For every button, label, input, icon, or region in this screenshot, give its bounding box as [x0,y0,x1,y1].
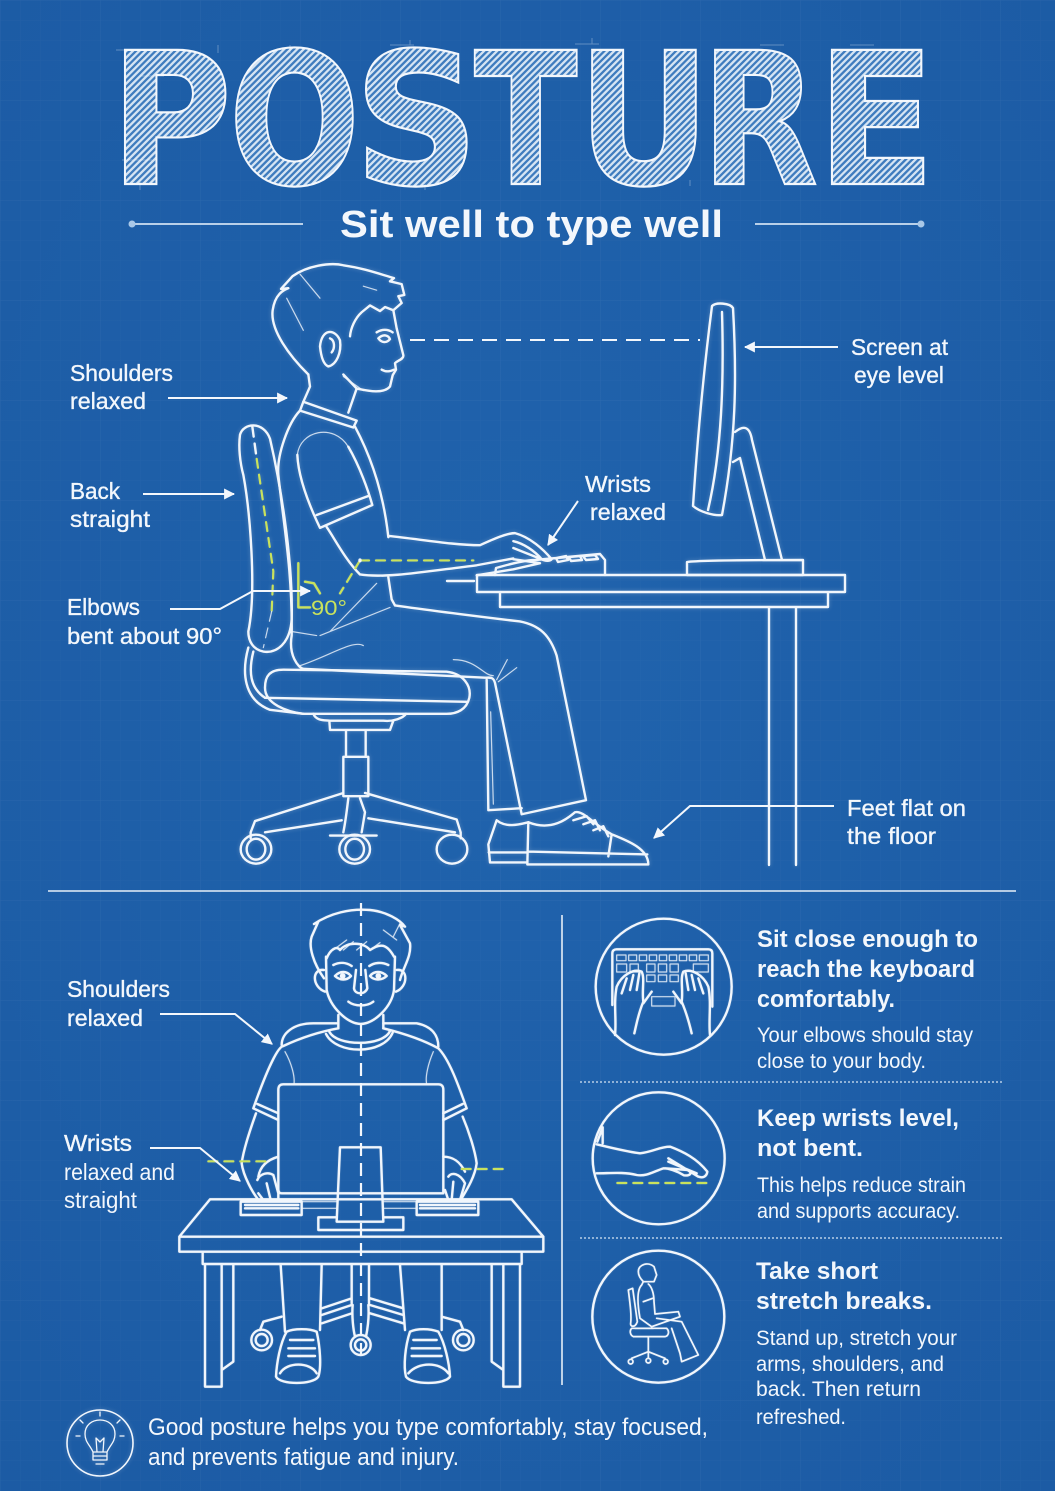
label: wrists relaxed [585,471,666,525]
side view: boy on chair at desk [239,264,648,864]
tip 1 text: reach the keyboard [757,956,975,983]
label: elbows bent: bent about 90° [67,623,222,649]
chair back top [282,1023,438,1047]
torso back [278,411,303,669]
label: 90 degrees: 90° [311,597,347,620]
row divider dotted [580,1081,1002,1083]
title: S [354,14,479,228]
base [251,793,461,838]
label: wrists relaxed and straight: Wrists [64,1130,132,1156]
eyes nose mouth [333,963,388,979]
hair [272,264,404,374]
arrow: back straight [143,493,234,495]
footer note [148,1414,708,1471]
desk legs [205,1265,520,1387]
front view: boy at desk [179,910,543,1387]
column divider [561,915,563,1385]
arrow: screen at eye level [745,346,838,348]
icon: light bulb [67,1410,133,1476]
title: U [577,14,711,228]
chair casters and base [260,1317,463,1330]
tip 2 text [757,1105,966,1223]
title: O [228,14,361,228]
label: shoulders relaxed [70,360,173,414]
seat [265,670,470,714]
label: wrists relaxed: Wrists [585,471,651,497]
label: back straight: straight [70,506,151,532]
tip 2 text: and supports accuracy. [757,1200,960,1223]
chair column [322,1265,403,1337]
chest [355,427,388,537]
tip 1 text: close to your body. [757,1050,926,1073]
label: shoulders relaxed front [67,976,170,1031]
monitor screen [693,304,735,515]
monitor [278,1084,443,1193]
title: T [474,14,578,228]
chair back [239,425,292,652]
label: feet flat: the floor [847,823,936,849]
label: wrists relaxed and straight: relaxed and [64,1159,175,1185]
tip 2 text: This helps reduce strain [757,1174,966,1197]
label: shoulders relaxed front: Shoulders [67,976,170,1002]
footer note: Good posture helps you type comfortably, stay focused, [148,1414,708,1441]
keyboards [241,1202,478,1215]
label: shoulders relaxed front: relaxed [67,1005,143,1031]
tip 3 text: arms, shoulders, and [756,1353,944,1376]
neck [303,374,357,413]
monitor stand [318,1147,403,1230]
neck and collar [326,1015,393,1050]
label: shoulders relaxed: Shoulders [70,360,173,386]
lower torso [388,577,395,605]
green guides [208,1161,508,1169]
label: wrists relaxed and straight: straight [64,1187,138,1213]
tip 1 text: comfortably. [757,986,895,1013]
arrow: feet flat [654,806,834,838]
label: feet flat: Feet flat on [847,795,966,821]
label: screen at eye level [851,334,949,388]
tip 3 text: refreshed. [756,1406,846,1429]
tip 3 text: Take short [756,1258,878,1285]
arrow: shoulders relaxed side [168,397,287,399]
eye and mouth [377,330,394,371]
tip 2 text: not bent. [757,1135,863,1162]
footer note: and prevents fatigue and injury. [148,1444,459,1471]
pedestal [313,714,406,796]
tip 3 text: stretch breaks. [756,1288,932,1315]
casters [241,835,271,864]
label: wrists relaxed: relaxed [590,499,666,525]
tip 1 text: Your elbows should stay [757,1024,973,1047]
ears [315,970,405,992]
center line [360,903,362,1362]
title: R [701,14,818,228]
title: P [110,14,232,228]
monitor stand [687,428,803,575]
shoulders and shirt [253,1028,467,1120]
legs [281,1265,442,1332]
ear [320,332,340,366]
label: elbows bent [67,594,222,649]
icon: seated figure [592,1251,724,1383]
shoes [276,1329,320,1383]
desk, keyboard and monitor [447,304,845,865]
subtitle with rules [128,204,924,246]
hair [311,910,410,980]
arrow: elbows bent [170,591,310,609]
desk [179,1199,543,1264]
green elbow guides and 90 degree mark [298,558,473,607]
hands [257,1173,465,1200]
row divider dotted [580,1237,1002,1239]
eye level dashed line [410,339,700,341]
title [110,14,936,228]
icon: level wrist [593,1092,725,1224]
arrow: shoulders relaxed front [160,1014,272,1044]
desk [447,575,845,865]
label: elbows bent: Elbows [67,594,140,620]
sleeve [297,432,348,455]
label: screen at eye level: Screen at [851,334,949,360]
tip 1 text: Sit close enough to [757,926,978,953]
thigh and shin [303,605,586,814]
collar [300,402,357,428]
boy side figure [239,264,648,864]
face [326,957,395,1024]
subtitle with rules: Sit well to type well [340,204,723,246]
label: shoulders relaxed: relaxed [70,388,146,414]
label: back straight: Back [70,478,120,504]
arrow: wrists relaxed [548,501,578,545]
arrow: wrists front [150,1148,240,1181]
arm [327,527,552,576]
tip 2 text: Keep wrists level, [757,1105,959,1132]
label: feet flat [847,795,966,849]
chair post [245,648,303,714]
tip 3 text: back. Then return [756,1378,921,1401]
tip 3 text: Stand up, stretch your [756,1327,957,1350]
keyboard [495,554,605,575]
arms [242,1113,477,1198]
section divider [48,890,1016,892]
label: back straight [70,478,151,532]
shoes [488,820,528,862]
tip 1 text [757,926,978,1073]
face [343,310,403,391]
label: wrists relaxed and straight [64,1130,175,1213]
icon: hands on keyboard [596,919,732,1055]
tip 3 text [756,1258,957,1429]
title: E [816,14,936,228]
label: screen at eye level: eye level [854,362,944,388]
